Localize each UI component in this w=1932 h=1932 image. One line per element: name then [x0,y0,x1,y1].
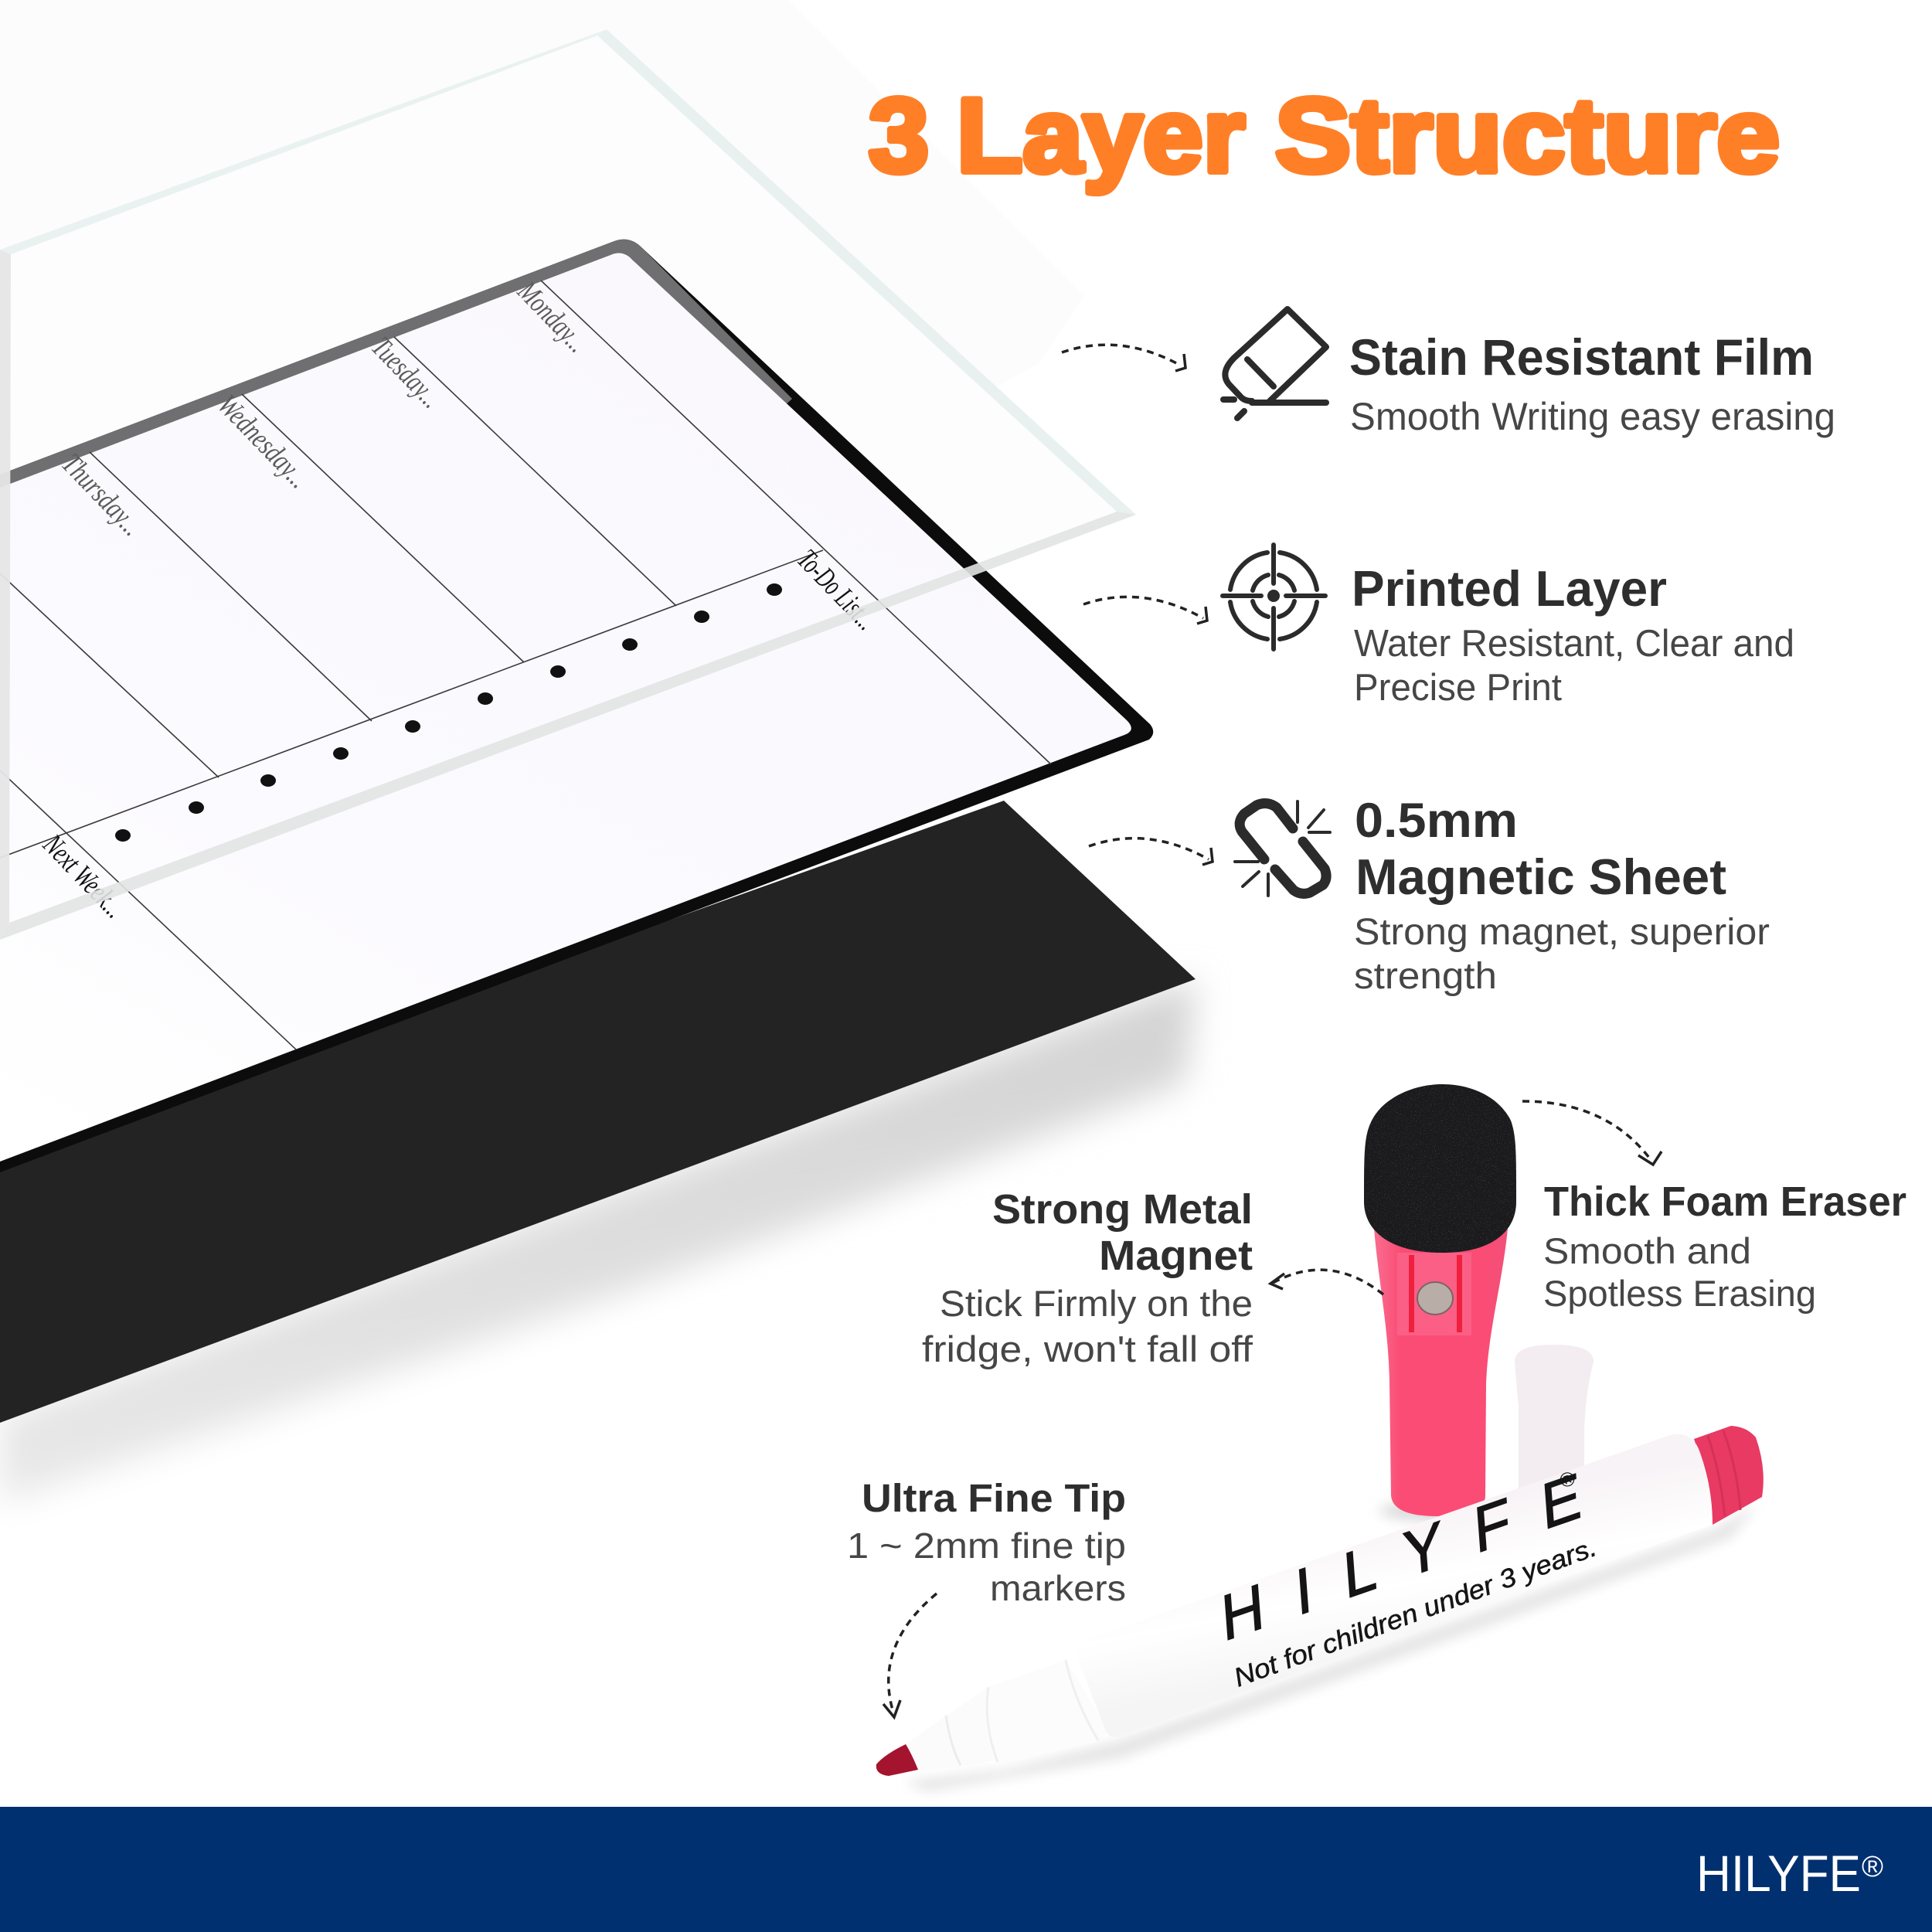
registered mark: ® [1556,1466,1578,1493]
icon: eraser [1223,309,1326,418]
feature: printed layer: Water Resistant, Clear and [1354,623,1794,665]
marker brand text: HILYFE [1219,1459,1583,1655]
planner day labels: Next Week... [36,828,131,924]
feature: magnetic sheet: strength [1354,956,1497,997]
feature: magnetic sheet: 0.5mm [1355,794,1518,848]
brand name: HILYFE [1696,1845,1861,1902]
marker barrel [1077,1434,1713,1737]
feature: stain resistant film: Smooth Writing easy erasing [1350,395,1835,438]
feature: magnetic sheet [1354,794,1770,997]
arrow: to foam eraser [1522,1101,1662,1165]
feature: thick foam eraser: Smooth and [1543,1230,1751,1271]
icon: target [1223,545,1325,649]
planner day labels: Thursday... [56,447,148,543]
black foam eraser [1360,1082,1519,1256]
layer: clear stain resistant film [0,29,1136,940]
feature: strong metal magnet: fridge, won't fall off [922,1328,1253,1369]
clear marker cap [1515,1345,1594,1504]
magnet mount panel [1397,1253,1471,1335]
pink end cap [1694,1426,1764,1525]
board writing surface [0,253,1131,1162]
arrow: to magnetic sheet [1089,838,1213,865]
planner grid lines [0,281,1051,1049]
marker warning text: Not for children under 3 years. [1230,1532,1600,1693]
feature: stain resistant film [1349,328,1835,438]
film right edge [597,29,1136,515]
layer: printed planner board [0,240,1153,1172]
red felt tip [876,1744,918,1776]
feature: magnetic sheet: Strong magnet, superior [1354,912,1770,953]
feature: thick foam eraser [1543,1179,1906,1314]
feature: ultra fine tip: markers [990,1568,1126,1608]
handle shadow [1379,1500,1495,1522]
marker shadow [904,1503,1758,1791]
brand name: ® [1862,1851,1883,1883]
pink handle [1374,1229,1508,1516]
cap ridges [1708,1430,1740,1516]
feature: stain resistant film: Stain Resistant Film [1349,328,1814,386]
title: Structure [1275,77,1780,194]
arrow: to marker tip [883,1594,937,1717]
title [869,77,1780,194]
feature: ultra fine tip: Ultra Fine Tip [862,1476,1126,1520]
arrow: to film [1062,345,1185,371]
arrow: to magnet [1270,1270,1383,1294]
feature: strong metal magnet: Stick Firmly on the [940,1283,1253,1324]
planner day labels: Tuesday... [366,331,447,414]
board frame seen through the film [0,240,792,488]
feature: thick foam eraser: Thick Foam Eraser [1544,1179,1906,1225]
feature: ultra fine tip: 1 ~ 2mm fine tip [847,1526,1126,1566]
collar section [984,1660,1109,1764]
background haze behind film [0,0,1084,940]
cone step shading [946,1716,961,1765]
feature: magnetic sheet: Magnetic Sheet [1355,849,1726,905]
planner day labels: To-Do List... [791,543,883,637]
layer: magnetic sheet [0,801,1196,1423]
film interior tint [0,29,1136,940]
collar step shading [987,1660,1098,1762]
feature: strong metal magnet: Strong Metal [992,1186,1253,1233]
board frame [0,240,1153,1172]
feature: thick foam eraser: Spotless Erasing [1543,1273,1816,1314]
feature: printed layer: Precise Print [1354,667,1562,709]
to-do bullet dots [115,583,782,842]
footer band [0,1807,1932,1932]
feature: printed layer [1352,560,1794,709]
feature: strong metal magnet [922,1186,1253,1369]
marker pen [876,1426,1764,1791]
feature: ultra fine tip [847,1476,1126,1608]
magnetic sheet shadow [0,979,1196,1503]
planner day labels [36,275,883,924]
metal magnet [1417,1282,1453,1315]
film top edge [0,29,607,254]
title: 3 [869,77,929,194]
title: Layer [957,77,1245,194]
feature: printed layer: Printed Layer [1352,560,1667,617]
arrow: to printed layer [1083,597,1207,624]
icon: broken link [1235,801,1330,896]
feature: strong metal magnet: Magnet [1099,1233,1253,1279]
film bottom edge [0,512,1136,940]
film left edge [0,250,11,940]
planner day labels: Monday... [511,275,594,359]
cone section [906,1687,1005,1771]
planner day labels: Wednesday... [212,389,315,495]
eraser marker [1360,1082,1519,1522]
